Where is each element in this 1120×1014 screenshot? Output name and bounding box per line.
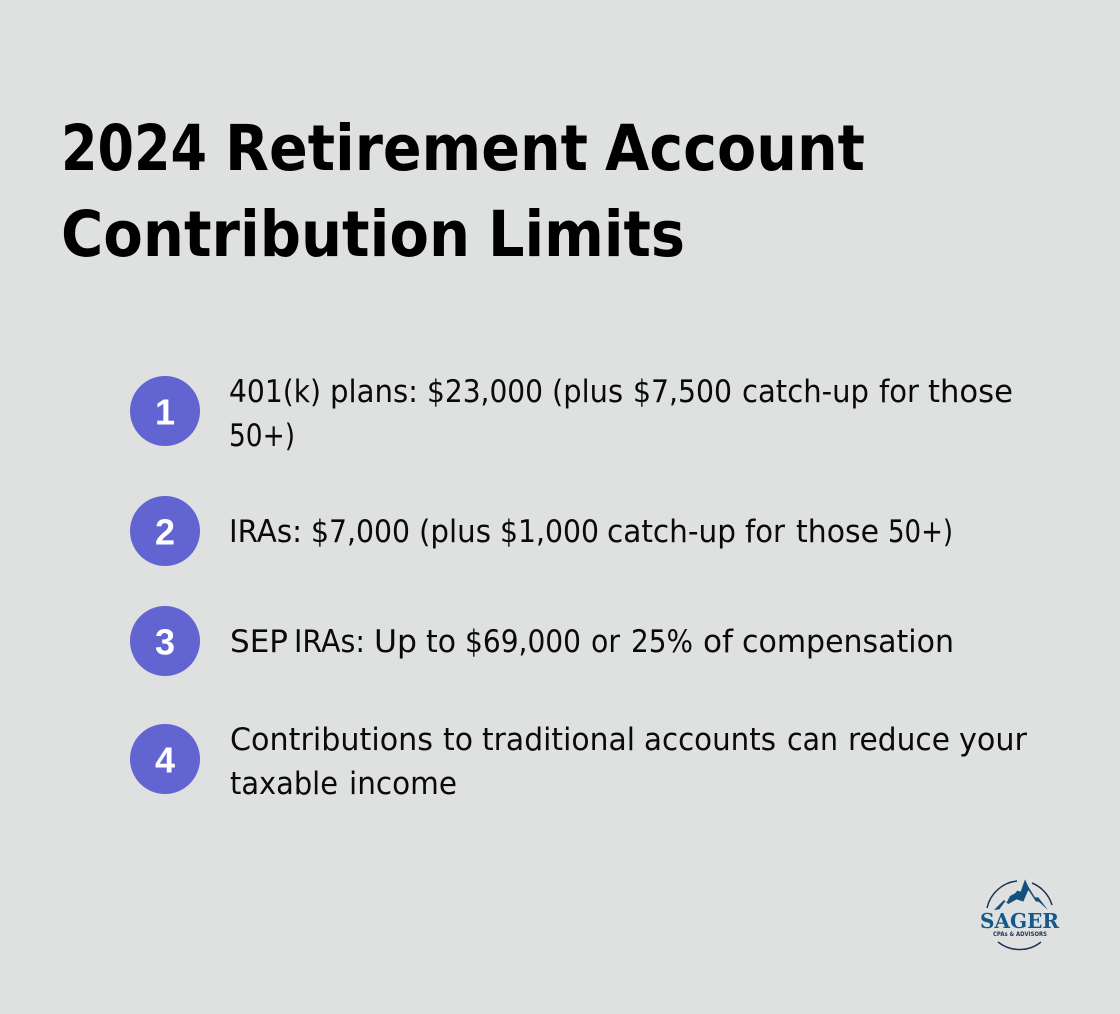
text: 401(k) plans	[229, 374, 1013, 454]
text: IRAs: IRAs:	[229, 514, 302, 550]
text: SEP IRAs	[230, 624, 954, 660]
text: 401(k) plans: those	[928, 374, 1013, 410]
number badge 4: 4	[155, 740, 175, 780]
text: IRAs: catch-up	[607, 514, 736, 550]
text: SEP IRAs: to	[426, 624, 456, 660]
text: traditional accounts: to	[443, 722, 473, 758]
number badge 3	[130, 606, 200, 676]
text: 401(k) plans: plans:	[330, 374, 418, 410]
text: SEP IRAs: of	[703, 624, 734, 660]
title: Limits	[488, 198, 685, 271]
text: SEP IRAs: SEP	[230, 624, 288, 660]
logo: Sager CPAs & Advisors	[980, 879, 1060, 950]
title: 2024	[61, 112, 207, 185]
list item 4	[130, 722, 1027, 802]
title	[61, 112, 865, 271]
number badge 4	[130, 724, 200, 794]
number badge 2	[130, 496, 200, 566]
text: IRAs: those	[796, 514, 879, 550]
text: SEP IRAs: Up	[374, 624, 417, 660]
text: IRAs: 50+)	[888, 514, 953, 550]
logo ring	[987, 881, 1052, 950]
list item 1	[130, 374, 1013, 454]
text: 401(k) plans: $23,000	[427, 374, 543, 410]
text: traditional accounts: Contributions	[230, 722, 433, 758]
text: SEP IRAs: $69,000	[465, 624, 581, 660]
number badge 2: 2	[155, 512, 175, 552]
text: IRAs: for	[745, 514, 785, 550]
list item 3	[130, 606, 954, 676]
text: IRAs: (plus	[419, 514, 491, 550]
title: Retirement	[225, 112, 588, 185]
logo tagline: CPAs & ADVISORS	[993, 932, 1047, 938]
text: traditional accounts: reduce	[848, 722, 950, 758]
text: 401(k) plans: $7,500	[633, 374, 732, 410]
text: 401(k) plans: for	[879, 374, 919, 410]
text: SEP IRAs: compensation	[742, 624, 954, 660]
number badge 1: 1	[155, 392, 175, 432]
text: 401(k) plans: (plus	[552, 374, 623, 410]
icon: mountains	[994, 879, 1048, 910]
text: traditional accounts: your	[959, 722, 1027, 758]
text: traditional accounts	[230, 722, 1027, 802]
text: traditional accounts: taxable	[230, 766, 338, 802]
number badge 3: 3	[155, 622, 175, 662]
text: SEP IRAs: 25%	[631, 624, 693, 660]
text: traditional accounts: accounts	[644, 722, 776, 758]
number badge 1	[130, 376, 200, 446]
text: 401(k) plans: 401(k)	[229, 374, 321, 410]
text: SEP IRAs: or	[591, 624, 620, 660]
text: 401(k) plans: catch-up	[742, 374, 869, 410]
text: traditional accounts: traditional	[482, 722, 635, 758]
text: traditional accounts: income	[349, 766, 457, 802]
text: IRAs: $1,000	[500, 514, 599, 550]
text: SEP IRAs: IRAs:	[294, 624, 365, 660]
logo wordmark: SAGER	[980, 909, 1060, 933]
title: Account	[605, 112, 865, 185]
title: Contribution	[61, 198, 470, 271]
list item 2	[130, 496, 953, 566]
text: traditional accounts: can	[787, 722, 838, 758]
text: IRAs: $7,000	[311, 514, 410, 550]
text: 401(k) plans: 50+)	[229, 418, 295, 454]
text: IRAs	[229, 514, 953, 550]
